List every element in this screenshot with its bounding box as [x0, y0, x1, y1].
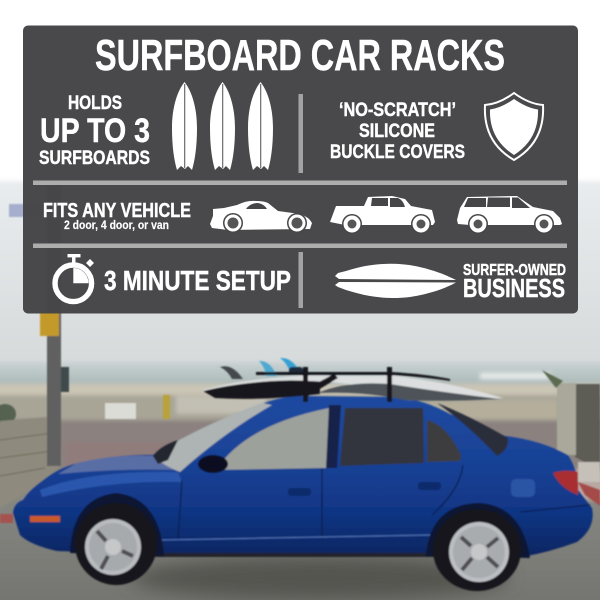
door lines — [178, 465, 463, 540]
tail light — [553, 471, 578, 495]
right wall post and fence — [575, 384, 600, 470]
front window — [216, 408, 329, 470]
fits any vehicle text: 2 door, 4 door, or van — [64, 220, 169, 232]
photo: beach background with car — [0, 181, 600, 600]
no-scratch text: BUCKLE COVERS — [330, 141, 465, 163]
sign pole — [47, 181, 61, 466]
icon: pickup truck — [330, 196, 435, 234]
info panel — [23, 26, 578, 314]
front wheel — [70, 493, 164, 556]
side marker — [30, 516, 60, 522]
yellow sign — [40, 312, 59, 336]
blue ocean sign — [9, 204, 43, 217]
hood highlight — [58, 456, 178, 474]
icon: horizontal surfboard — [335, 264, 456, 298]
brick wall — [0, 416, 62, 508]
car body — [13, 396, 593, 557]
no-scratch text — [330, 99, 465, 163]
fits any vehicle text: FITS ANY VEHICLE — [43, 200, 191, 222]
rear window — [437, 403, 508, 456]
rear side window — [340, 408, 424, 466]
handles — [288, 488, 311, 496]
fits any vehicle text — [43, 200, 191, 232]
roof rack — [256, 367, 450, 402]
icon: stopwatch — [55, 254, 94, 302]
no-scratch text: SILICONE — [359, 120, 435, 142]
icon: shield — [485, 93, 543, 160]
surfer-owned text: BUSINESS — [463, 273, 565, 303]
rear wheel — [426, 503, 530, 558]
fins on surfboard — [220, 366, 243, 379]
setup text: 3 MINUTE SETUP — [104, 265, 291, 296]
icon: sports car — [210, 201, 312, 233]
surfer-owned text: SURFER-OWNED — [463, 262, 566, 279]
holds up to 3 text: UP TO 3 — [40, 112, 150, 150]
icon: minivan — [457, 196, 562, 234]
holds up to 3 text: SURFBOARDS — [39, 147, 150, 169]
icon: three surfboards — [172, 82, 273, 170]
car ground shadow — [130, 556, 510, 600]
surfboard on rack — [203, 380, 320, 399]
holds up to 3 text: HOLDS — [68, 92, 122, 114]
windshield — [158, 403, 272, 472]
yellow bollard — [163, 395, 170, 419]
surfer-owned text — [463, 262, 566, 303]
white warning sign — [105, 403, 136, 419]
fuel door — [511, 479, 535, 497]
plant — [0, 404, 16, 424]
holds up to 3 text — [39, 92, 150, 169]
door pillar — [326, 405, 341, 468]
mirror — [198, 455, 228, 473]
no-scratch text: ‘NO-SCRATCH’ — [339, 99, 456, 121]
background scenery — [0, 181, 600, 600]
